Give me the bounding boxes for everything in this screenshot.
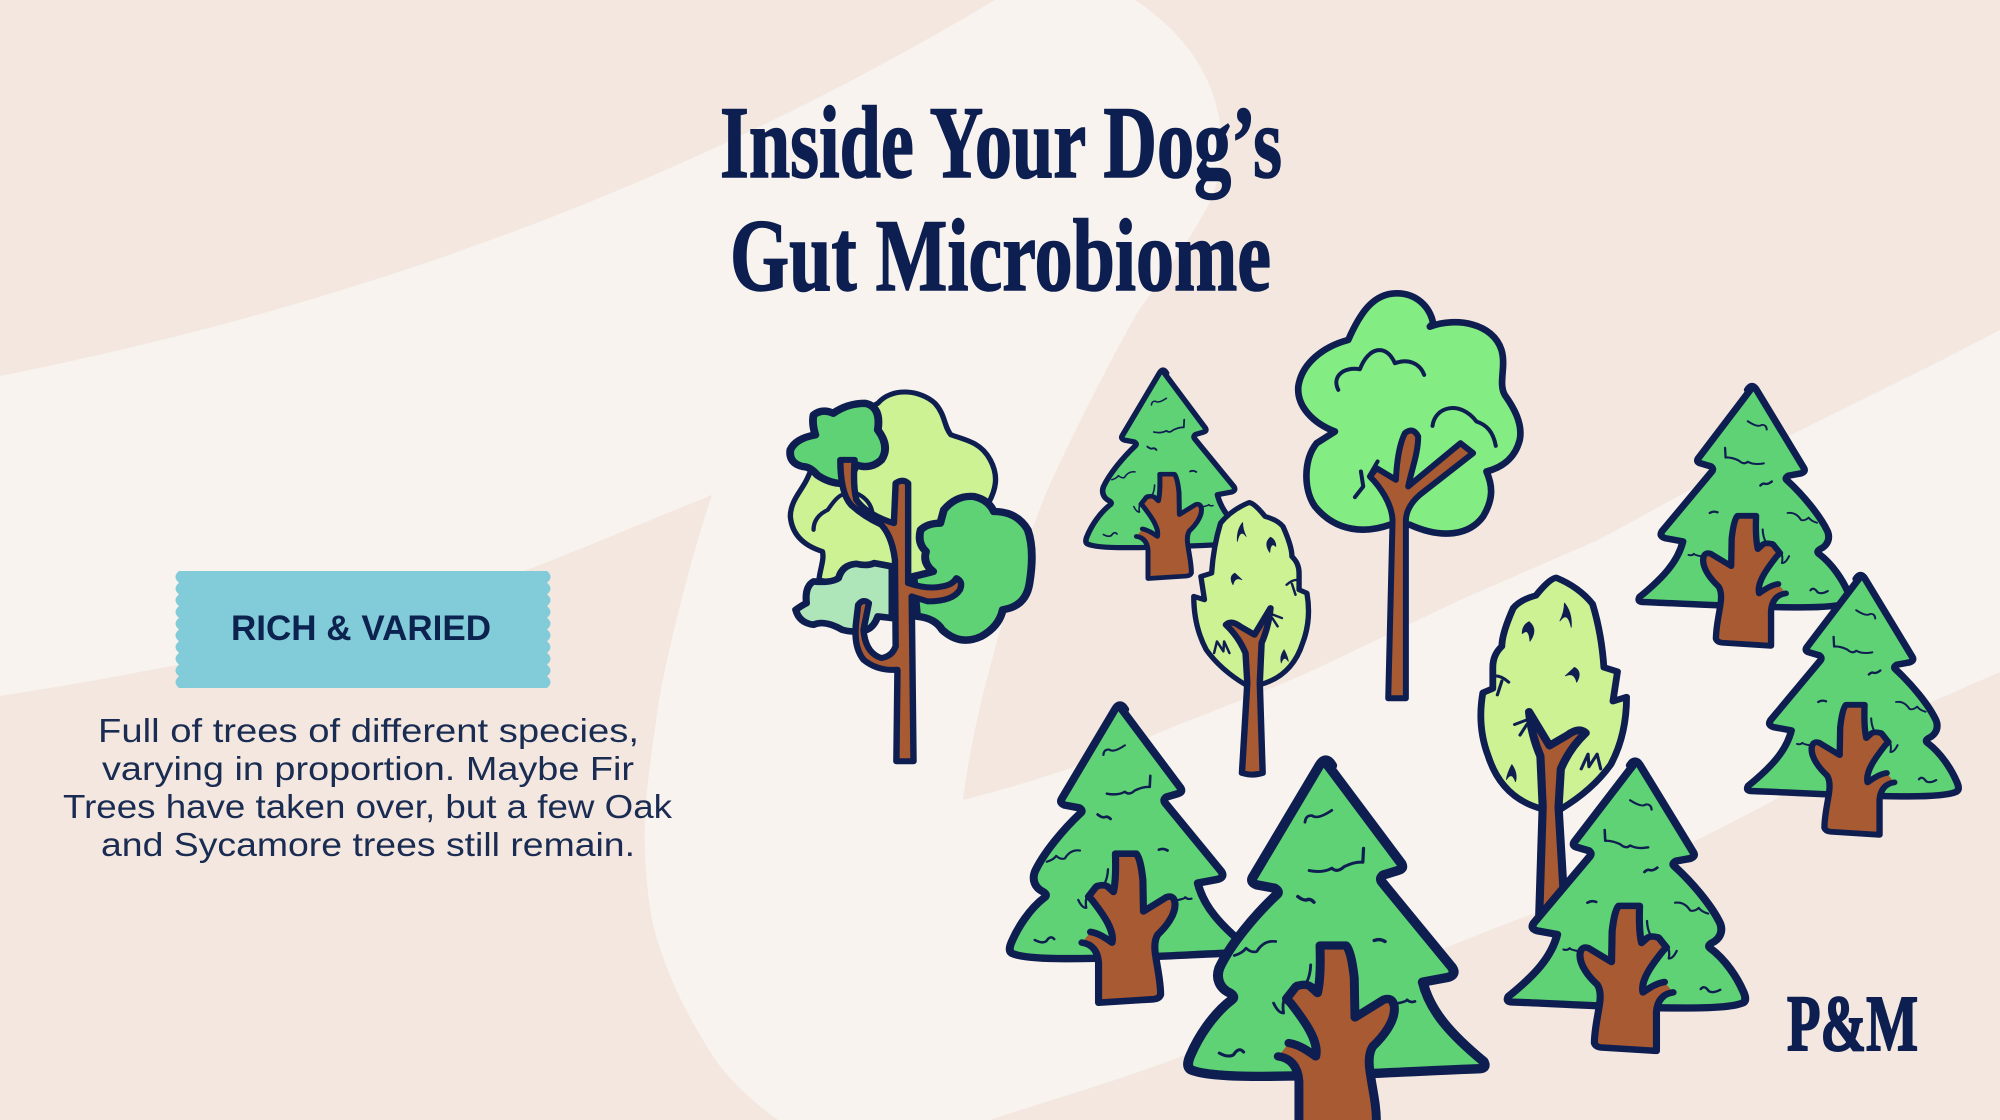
title: Gut Microbiome [730,199,1271,313]
icon: far right fir tree [1747,575,1958,835]
label ribbon: rich and varied [176,571,550,688]
icon: small fir tree [1086,370,1252,579]
title [720,86,1282,313]
icon: small leaf tree [1194,503,1309,775]
icon: upper right fir tree [1639,386,1850,646]
body text [63,712,673,863]
icon: bottom right fir tree [1508,761,1745,1051]
icon: large center fir tree [1188,760,1485,1120]
logo: P&M [1787,981,1918,1068]
title: Inside Your Dog’s [720,86,1282,200]
icon: lower left fir tree [1010,705,1247,1003]
icon: mixed broadleaf tree [790,392,1032,761]
icon: right leaf tree [1481,578,1627,923]
icon: large round tree [1298,293,1520,698]
body text: varying in proportion. Maybe Fir [102,750,634,787]
body text: Full of trees of different species, [98,712,639,749]
label ribbon: rich and varied: RICH & VARIED [231,609,491,648]
body text: Trees have taken over, but a few Oak [63,788,673,825]
body text: and Sycamore trees still remain. [101,826,635,863]
